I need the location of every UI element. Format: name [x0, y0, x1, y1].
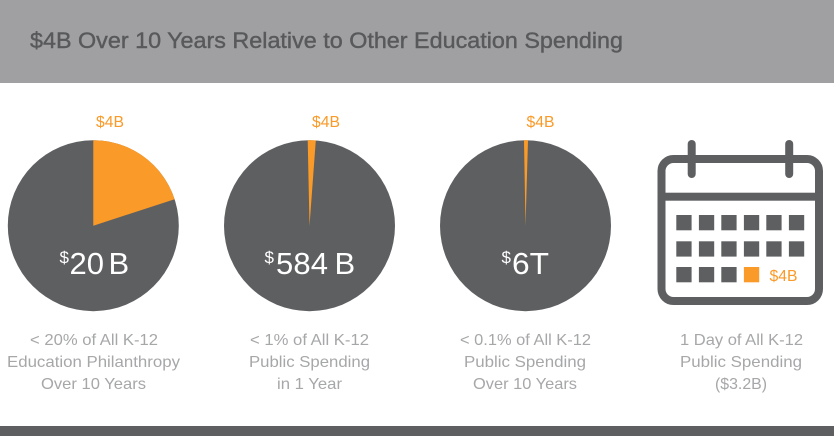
pie chart: $584 B [224, 140, 395, 311]
value: $20B [60, 246, 129, 281]
value: $20B: $ [60, 248, 70, 267]
panel: public spending 1 year [224, 114, 395, 393]
caption [7, 332, 180, 393]
value: $20B: 20 [70, 246, 104, 281]
caption [680, 332, 803, 393]
caption: < 0.1% of All K-12 [460, 332, 591, 349]
caption: Education Philanthropy [7, 354, 180, 371]
pie chart: $20B [8, 140, 179, 311]
caption: Public Spending [249, 354, 370, 371]
caption: < 1% of All K-12 [250, 332, 369, 349]
value: $584 B [264, 246, 355, 281]
value: $584 B: $ [264, 248, 274, 267]
value: $20B: B [108, 246, 129, 281]
caption: Over 10 Years [473, 376, 577, 393]
value: $584 B: B [334, 246, 355, 281]
caption: 1 Day of All K-12 [680, 332, 803, 349]
value: $6T: $ [502, 248, 512, 267]
value: $6T: 6T [512, 246, 549, 281]
header band [0, 0, 834, 83]
title: $4B Over 10 Years Relative to Other Education Spending [30, 28, 623, 53]
caption: < 20% of All K-12 [30, 332, 158, 349]
pie chart: $6T [440, 140, 611, 311]
icon: calendar [658, 140, 822, 301]
caption [249, 332, 370, 393]
caption: Public Spending [464, 354, 586, 371]
label: $4B: $4B [526, 114, 554, 131]
value: $584 B: 584 [276, 246, 328, 281]
panel: one day of spending [658, 140, 822, 393]
caption: Public Spending [680, 354, 802, 371]
caption [460, 332, 591, 393]
footer band [0, 426, 834, 436]
icon: calendar: $4B [770, 268, 798, 285]
caption: in 1 Year [277, 376, 343, 393]
caption: Over 10 Years [41, 376, 146, 393]
caption: ($3.2B) [715, 376, 767, 393]
label: $4B: $4B [312, 114, 340, 131]
label: $4B: $4B [96, 114, 124, 131]
panel: education philanthropy [7, 114, 180, 393]
panel: public spending 10 years [440, 114, 611, 393]
